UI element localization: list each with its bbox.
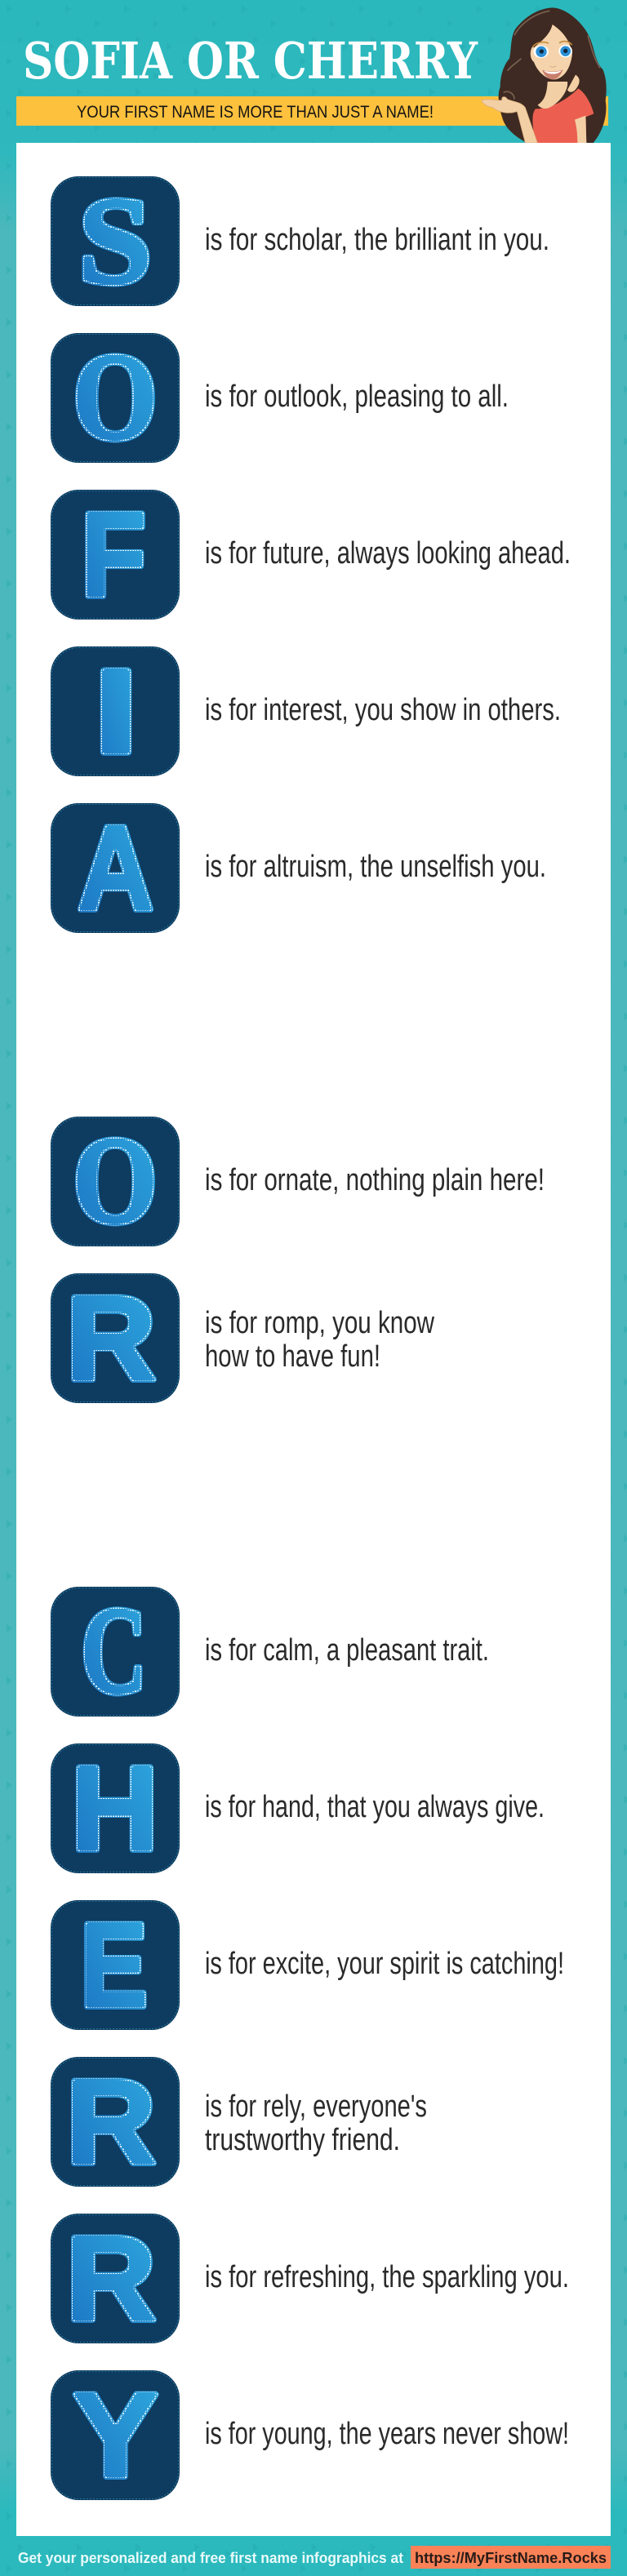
footer: https://MyFirstName.Rocks [415,2550,607,2566]
row: I: I [94,645,138,778]
row: O: O [73,1112,158,1249]
row: Y [51,2369,569,2502]
row: F [51,488,571,621]
row: E [51,1899,564,2032]
row: H: H [71,1742,158,1875]
row: C [51,1582,489,1719]
row: S [51,172,549,309]
row: R: how to have fun! [205,1339,380,1374]
row: R [51,2055,427,2188]
footer: Get your personalized and free first name infographics at [18,2550,403,2566]
icon: cartoon woman [482,7,607,143]
row: E: E [80,1899,148,2032]
subtitle ribbon: YOUR FIRST NAME IS MORE THAN JUST A NAME! [77,103,434,122]
row: O: O [73,328,158,465]
row: R: R [66,2055,156,2188]
row: R: R [66,2212,156,2345]
subtitle ribbon [16,96,608,126]
row: O [51,1112,545,1249]
row: O [51,328,509,465]
footer [18,2546,611,2569]
row: R [51,1272,434,1405]
row: S: S [78,172,152,309]
row: R: is for rely, everyone's [205,2090,427,2124]
title: SOFIA OR CHERRY [23,31,478,91]
row: O: is for outlook, pleasing to all. [205,380,509,414]
row: R: R [66,1272,156,1405]
row: A: A [78,802,153,935]
row: C: is for calm, a pleasant trait. [205,1633,489,1668]
row: C: C [81,1582,147,1719]
row: R [51,2212,569,2345]
row: Y: Y [73,2369,158,2502]
row: R: trustworthy friend. [205,2123,400,2157]
row: H [51,1742,545,1875]
row: R: is for romp, you know [205,1306,434,1340]
row: A [51,802,546,935]
row: I [51,645,561,778]
row: F: F [81,488,146,621]
